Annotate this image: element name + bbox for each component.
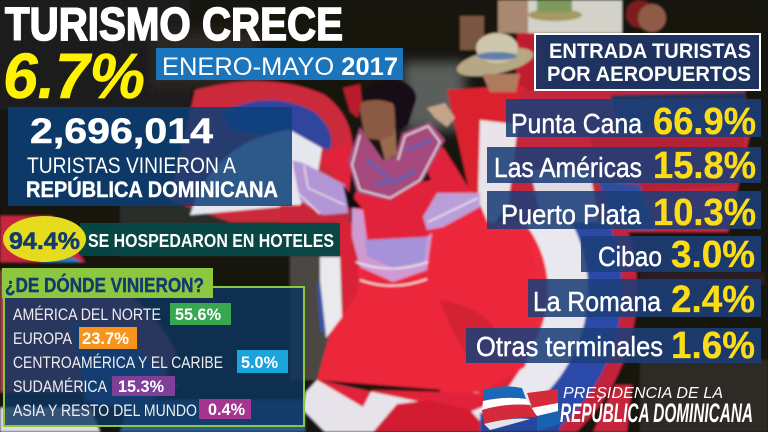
row: south america: 15.3% — [118, 377, 164, 396]
logo: Presidencia de la República Dominicana — [482, 385, 753, 431]
origin heading: ¿DE DÓNDE VINIERON? — [5, 273, 204, 297]
row: north america: AMÉRICA DEL NORTE — [13, 305, 161, 324]
panel: airports heading: ENTRADA TURISTAS — [549, 40, 751, 63]
row: europe — [13, 327, 137, 349]
panel: airports heading: POR AEROPUERTOS — [547, 63, 751, 86]
row: europe: 23.7% — [82, 329, 129, 348]
airport row: Otras terminales — [466, 325, 761, 367]
panel: airports heading — [535, 34, 760, 90]
row: asia and rest of world: ASIA Y RESTO DEL MUNDO — [13, 402, 197, 420]
row: south america — [13, 376, 175, 396]
airport row: La Romana: La Romana — [533, 286, 661, 317]
airport row: Las Américas: 15.8% — [653, 145, 756, 187]
airport row: Las Américas: Las Américas — [494, 152, 642, 183]
airport row: Otras terminales: Otras terminales — [476, 331, 663, 362]
row: central america and caribbean: CENTROAMÉRICA Y EL CARIBE — [13, 353, 223, 372]
airport row: Cibao: 3.0% — [671, 234, 755, 276]
airport row: Puerto Plata — [487, 191, 761, 234]
airport row: La Romana: 2.4% — [671, 279, 755, 321]
logo: Presidencia de la República Dominicana: PRESIDENCIA DE LA — [563, 385, 723, 402]
airport row: La Romana — [528, 279, 761, 321]
callout: hotels: SE HOSPEDARON EN HOTELES — [88, 231, 334, 251]
airport row: Punta Cana — [506, 99, 761, 143]
origin heading — [2, 268, 213, 298]
panel: total tourists: 2,696,014 — [30, 112, 214, 151]
airport row: Cibao: Cibao — [598, 241, 662, 272]
row: south america: SUDAMÉRICA — [13, 377, 107, 396]
man with hat — [447, 85, 560, 200]
airport row: Punta Cana: Punta Cana — [511, 108, 642, 139]
headline growth figure: 6.7% — [3, 40, 145, 112]
panel: origin of tourists — [2, 268, 304, 426]
left red swirl — [170, 81, 353, 222]
icon: flag emblem — [482, 386, 560, 431]
skirt hem — [303, 380, 500, 432]
head — [358, 93, 397, 140]
date badge: ENERO-MAYO 2017 — [162, 53, 398, 81]
airport row: Otras terminales: 1.6% — [671, 325, 755, 367]
callout: hotels: 94.4% — [9, 228, 80, 255]
crowd top — [403, 62, 465, 130]
left white skirt stripe — [320, 257, 342, 338]
ruffled collar — [348, 122, 445, 200]
neck and chest — [378, 125, 397, 160]
airport row: Puerto Plata: Puerto Plata — [501, 199, 641, 230]
hand — [427, 103, 455, 127]
waist sash — [352, 208, 432, 282]
airport row: Puerto Plata: 10.3% — [653, 192, 756, 234]
right sleeve ruffle — [423, 193, 480, 230]
row: north america: 55.6% — [175, 305, 221, 324]
panel: total tourists: REPÚBLICA DOMINICANA — [26, 177, 278, 202]
skirt swirl rings — [440, 222, 637, 432]
row: north america — [13, 303, 231, 325]
left sleeve ruffle — [292, 160, 348, 215]
upper right skirt behind the arm — [436, 185, 540, 300]
left lower person — [0, 216, 85, 262]
row: europe: EUROPA — [13, 330, 72, 348]
airport row: Las Américas — [487, 145, 761, 187]
band under panel — [280, 205, 350, 223]
airport strip background — [505, 90, 750, 232]
callout: hotels — [3, 216, 340, 262]
row: asia and rest of world: 0.4% — [208, 400, 245, 419]
row: central america and caribbean: 5.0% — [241, 353, 278, 372]
airport row: Cibao — [581, 234, 761, 276]
panel: total tourists: TURISTAS VINIERON A — [27, 153, 236, 178]
panel: total tourists — [8, 107, 292, 206]
skirt — [317, 225, 540, 393]
airport row: Punta Cana: 66.9% — [653, 101, 756, 143]
bodice — [352, 180, 437, 240]
